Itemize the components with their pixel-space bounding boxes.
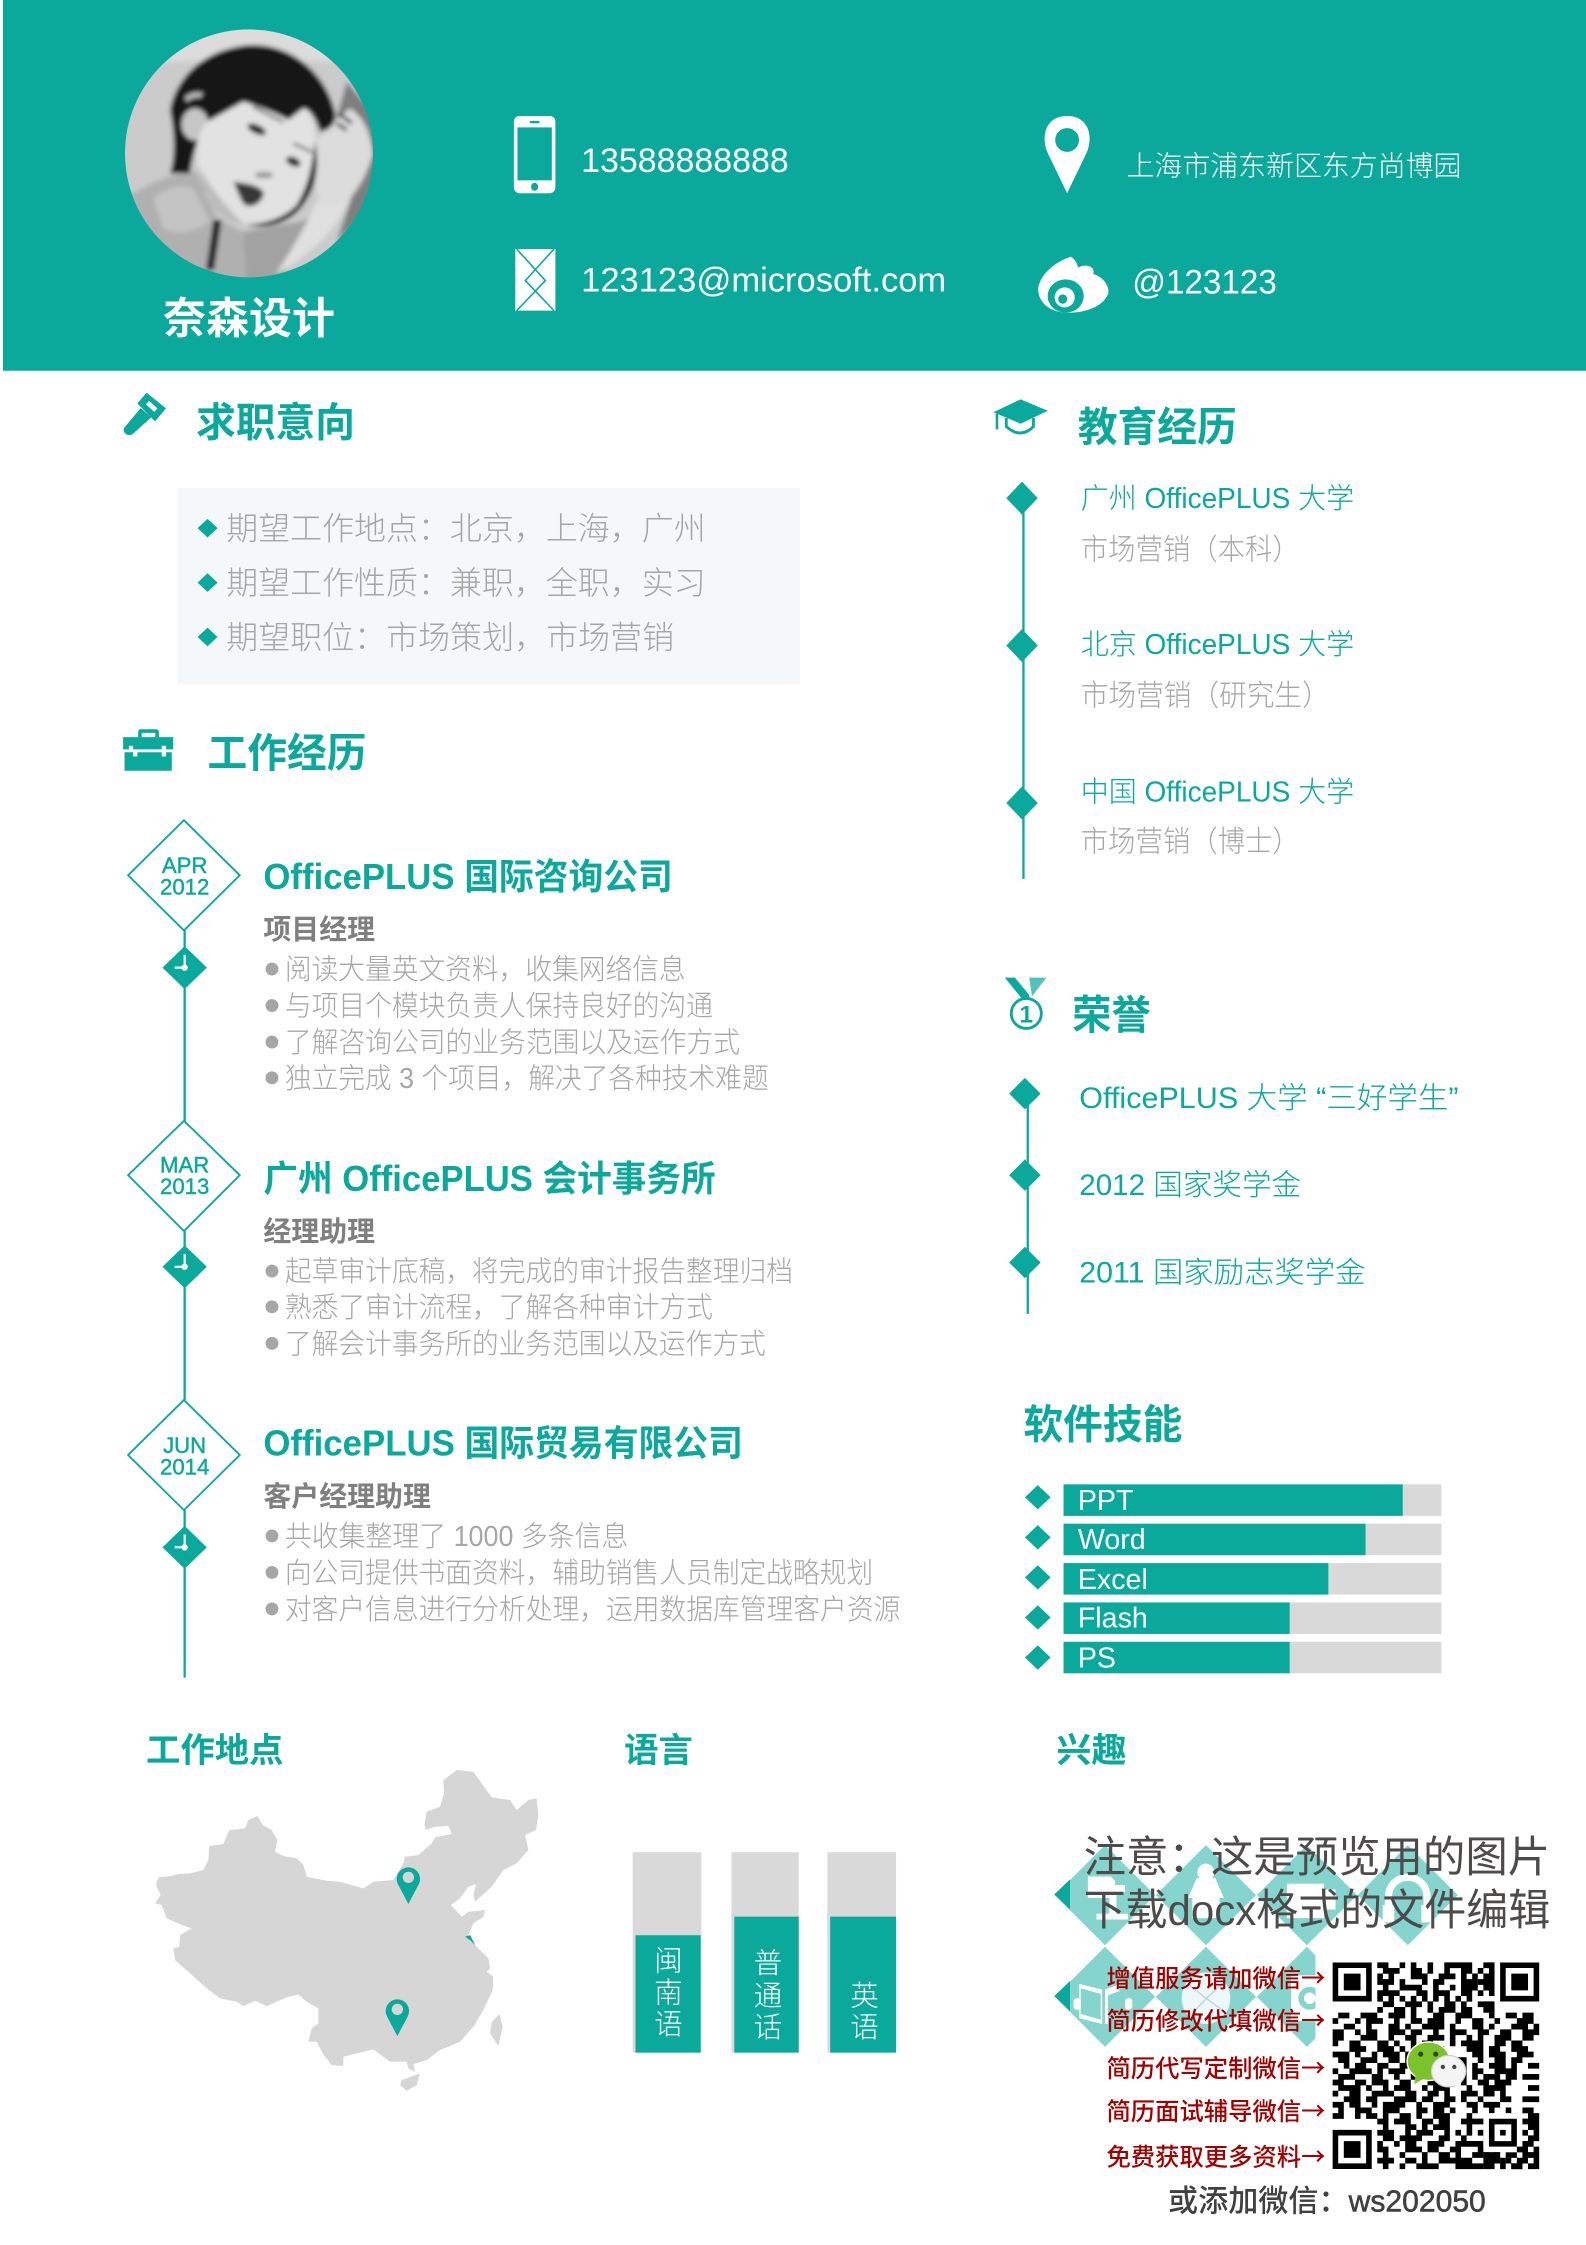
duties: 对客户信息进行分析处理，运用数据库管理客户资源 bbox=[285, 1594, 900, 1626]
date diamond: 2014 bbox=[160, 1454, 209, 1479]
intention list: 期望职位：市场策划，市场营销 bbox=[226, 619, 674, 655]
header band bbox=[3, 0, 1586, 371]
duties: 阅读大量英文资料，收集网络信息 bbox=[285, 954, 686, 986]
icon: wechat logo bbox=[1407, 2042, 1466, 2091]
honor entries: 2012 国家奖学金 bbox=[1079, 1169, 1301, 1202]
company: OfficePLUS 国际咨询公司 bbox=[263, 857, 673, 897]
heading: 兴趣 bbox=[1056, 1732, 1127, 1770]
preview notice: 下载docx格式的文件编辑 bbox=[1084, 1887, 1550, 1935]
panel: languages bbox=[624, 1732, 896, 2053]
job 3 bbox=[128, 1400, 900, 1626]
language bar: Mandarin: 话 bbox=[754, 2012, 782, 2044]
duties: 与项目个模块负责人保持良好的沟通 bbox=[285, 991, 713, 1023]
icon: phone bbox=[514, 116, 555, 193]
company: OfficePLUS 国际贸易有限公司 bbox=[263, 1424, 743, 1464]
icon: location pin bbox=[1045, 116, 1090, 193]
weibo handle: @123123 bbox=[1132, 263, 1277, 301]
email: 123123@microsoft.com bbox=[581, 261, 946, 299]
duties: 共收集整理了 1000 多条信息 bbox=[285, 1521, 628, 1553]
honor entries bbox=[1079, 1082, 1459, 1290]
language bar: Mandarin bbox=[731, 1852, 799, 2053]
promo lines: 简历修改代填微信→ bbox=[1106, 2003, 1325, 2038]
skill bar: PS bbox=[1025, 1642, 1441, 1675]
timeline bbox=[1006, 482, 1038, 879]
skill bar: Flash bbox=[1025, 1602, 1441, 1634]
duties: 了解会计事务所的业务范围以及运作方式 bbox=[285, 1328, 766, 1360]
date diamond bbox=[128, 820, 240, 930]
portrait photo bbox=[125, 29, 374, 278]
intention list bbox=[198, 511, 706, 655]
language bar: English: 英 bbox=[850, 1980, 879, 2012]
job 2 bbox=[128, 1121, 793, 1360]
QR code bbox=[1333, 1962, 1539, 2169]
promo lines bbox=[1106, 1960, 1325, 2174]
language bar: English bbox=[827, 1852, 896, 2053]
date diamond: APR bbox=[162, 853, 207, 878]
language bar: Minnan: 闽 bbox=[654, 1945, 683, 1977]
promo lines: 简历代写定制微信→ bbox=[1106, 2050, 1325, 2085]
school entries: 中国 OfficePLUS 大学 bbox=[1081, 777, 1354, 809]
clock marker bbox=[162, 946, 207, 989]
language bar: Minnan bbox=[633, 1852, 701, 2053]
school entries: 市场营销（博士） bbox=[1081, 826, 1300, 859]
icon: medal bbox=[1005, 978, 1046, 1029]
duties: 熟悉了审计流程，了解各种审计方式 bbox=[285, 1292, 713, 1324]
map pin: south bbox=[386, 1999, 409, 2036]
heading: 语言 bbox=[624, 1732, 693, 1770]
icon: graduation cap bbox=[993, 399, 1048, 433]
skill bar: Word: Word bbox=[1078, 1524, 1146, 1556]
address: 上海市浦东新区东方尚博园 bbox=[1127, 150, 1461, 181]
clock marker bbox=[162, 1526, 207, 1569]
date diamond: MAR bbox=[160, 1152, 209, 1177]
phone number: 13588888888 bbox=[581, 142, 789, 180]
name: 奈森设计 bbox=[163, 296, 335, 344]
date diamond: JUN bbox=[163, 1433, 206, 1458]
skill bar: Excel bbox=[1025, 1563, 1441, 1596]
skill bar: Word bbox=[1025, 1524, 1441, 1556]
job 1 bbox=[128, 820, 769, 1095]
duties bbox=[266, 1256, 793, 1360]
icon: envelope bbox=[515, 249, 555, 311]
duties: 起草审计底稿，将完成的审计报告整理归档 bbox=[285, 1256, 793, 1288]
heading: 软件技能 bbox=[1023, 1404, 1182, 1448]
date diamond: 2013 bbox=[160, 1174, 209, 1199]
school entries: 北京 OfficePLUS 大学 bbox=[1081, 629, 1354, 661]
duties bbox=[266, 1521, 900, 1626]
skill bar: PPT: PPT bbox=[1078, 1485, 1133, 1517]
duties: 独立完成 3 个项目，解决了各种技术难题 bbox=[285, 1063, 769, 1095]
icon: briefcase bbox=[123, 729, 173, 771]
promo lines: 简历面试辅导微信→ bbox=[1106, 2093, 1325, 2128]
promo lines: 增值服务请加微信→ bbox=[1106, 1960, 1325, 1995]
duties: 了解咨询公司的业务范围以及运作方式 bbox=[285, 1027, 740, 1059]
language bar: Minnan: 南 bbox=[654, 1978, 683, 2010]
date diamond: 2012 bbox=[160, 875, 209, 900]
heading: 工作经历 bbox=[208, 732, 366, 776]
language bar: Minnan: 语 bbox=[654, 2009, 683, 2041]
panel: software skills bbox=[1023, 1404, 1441, 1675]
panel: job intention bbox=[124, 393, 800, 684]
preview notice bbox=[1084, 1834, 1550, 1935]
panel: interests bbox=[1054, 1732, 1550, 2219]
date diamond bbox=[128, 1121, 240, 1231]
role: 客户经理助理 bbox=[263, 1481, 431, 1512]
language bar: Mandarin: 普 bbox=[754, 1948, 782, 1980]
duties bbox=[266, 954, 769, 1095]
heading: 荣誉 bbox=[1072, 994, 1151, 1038]
language bar: Mandarin: 通 bbox=[754, 1980, 782, 2012]
company: 广州 OfficePLUS 会计事务所 bbox=[263, 1159, 716, 1199]
school entries: 广州 OfficePLUS 大学 bbox=[1081, 483, 1354, 515]
school entries bbox=[1081, 483, 1354, 859]
panel: education bbox=[993, 399, 1354, 879]
interest icon diamonds bbox=[1054, 1845, 1458, 2047]
intention list: 期望工作地点：北京，上海，广州 bbox=[226, 511, 706, 547]
honor entries: OfficePLUS 大学 “三好学生” bbox=[1079, 1082, 1459, 1115]
school entries: 市场营销（研究生） bbox=[1081, 680, 1330, 713]
language bar: English: 语 bbox=[850, 2012, 879, 2044]
skill bar: Flash: Flash bbox=[1078, 1602, 1148, 1634]
skill bar: PPT bbox=[1025, 1484, 1441, 1517]
wechat id: 或添加微信：ws202050 bbox=[1168, 2184, 1486, 2219]
panel: work locations bbox=[146, 1732, 538, 2091]
timeline bbox=[1009, 1078, 1041, 1314]
heading: 求职意向 bbox=[196, 402, 355, 446]
clock marker bbox=[162, 1245, 207, 1288]
role: 项目经理 bbox=[263, 914, 375, 945]
icon: key bbox=[124, 393, 166, 435]
panel: honors bbox=[1005, 978, 1459, 1314]
date diamond bbox=[128, 1400, 240, 1510]
preview notice: 注意：这是预览用的图片 bbox=[1084, 1834, 1550, 1882]
map pin: north bbox=[397, 1867, 420, 1904]
skill bar: Excel: Excel bbox=[1078, 1564, 1148, 1596]
icon: medal: 1 bbox=[1020, 1002, 1033, 1029]
honor entries: 2011 国家励志奖学金 bbox=[1079, 1257, 1366, 1290]
duties: 向公司提供书面资料，辅助销售人员制定战略规划 bbox=[285, 1557, 873, 1589]
skill bar: PS: PS bbox=[1078, 1643, 1116, 1675]
school entries: 市场营销（本科） bbox=[1081, 534, 1300, 567]
role: 经理助理 bbox=[263, 1216, 375, 1247]
intention list: 期望工作性质：兼职，全职，实习 bbox=[226, 565, 706, 601]
icon: weibo bbox=[1038, 257, 1109, 313]
heading: 教育经历 bbox=[1078, 406, 1237, 450]
timeline axis bbox=[184, 930, 186, 1678]
china map bbox=[155, 1770, 538, 2091]
heading: 工作地点 bbox=[146, 1732, 283, 1770]
promo lines: 免费获取更多资料→ bbox=[1106, 2139, 1325, 2174]
panel: work experience bbox=[123, 729, 900, 1678]
intention box bbox=[178, 488, 800, 684]
